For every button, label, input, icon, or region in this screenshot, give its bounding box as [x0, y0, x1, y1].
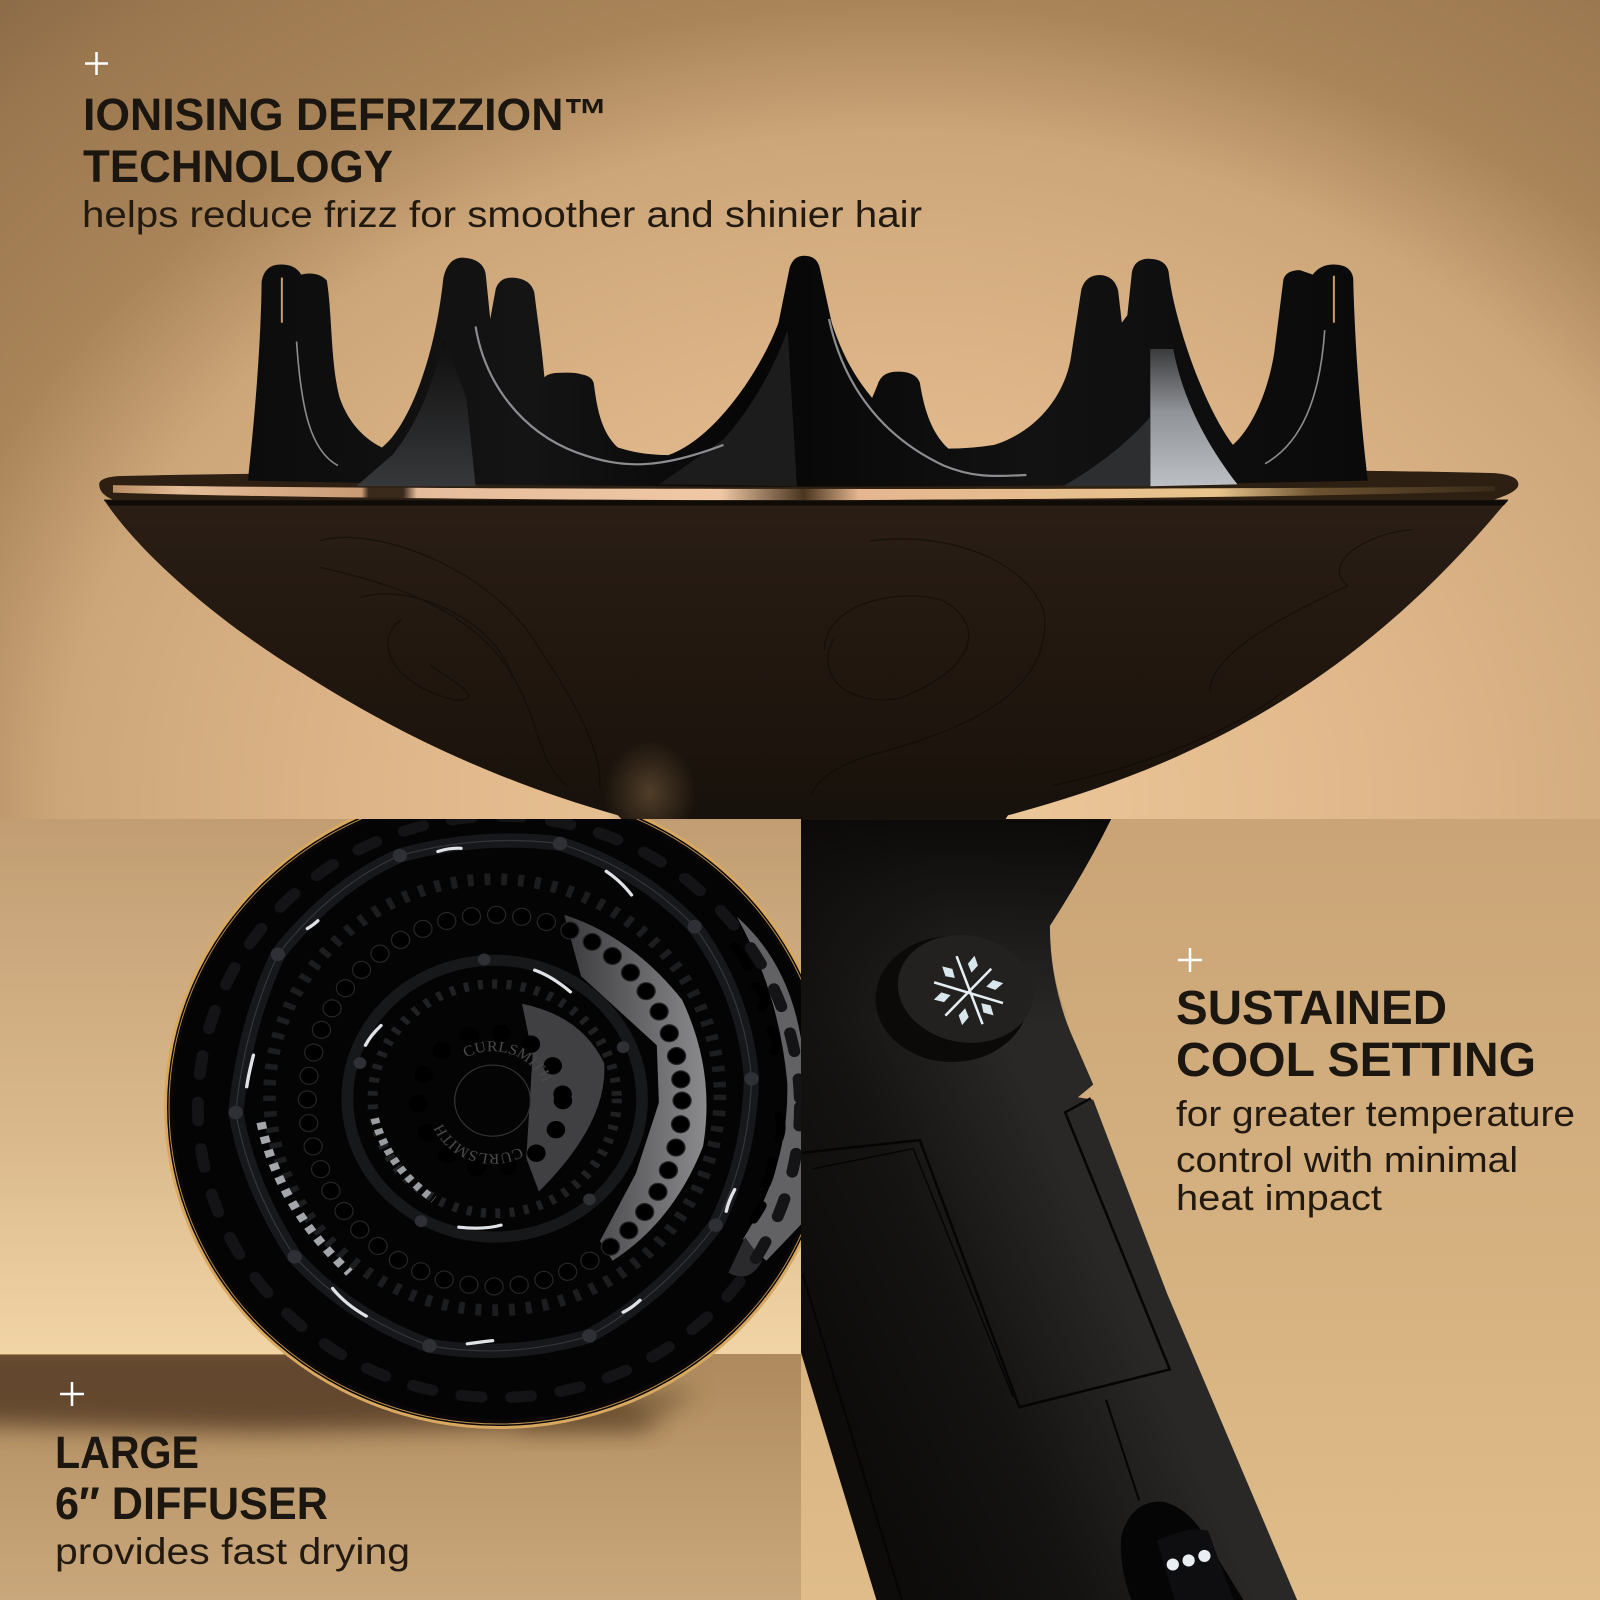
cool button — [876, 936, 1024, 1062]
logo: curlsmith: CURLSMITH — [433, 1124, 522, 1164]
panel: ionising technology — [0, 0, 1600, 845]
diffuser side view — [99, 256, 1518, 845]
text: frizz description: helps reduce frizz for smoother and shinier hair — [82, 194, 922, 235]
heading: sustained cool setting: COOL SETTING — [1176, 1034, 1536, 1087]
logo: curlsmith: CURLSMITH — [464, 1041, 552, 1081]
text: temperature description: for greater temperature — [1176, 1093, 1575, 1134]
heading: ionising defrizzion: IONISING DEFRIZZION™ — [83, 89, 608, 140]
slots on lit section — [752, 1122, 786, 1224]
panel: sustained cool setting — [800, 819, 1600, 1600]
heading: large 6 inch diffuser: 6″ DIFFUSER — [55, 1478, 328, 1529]
text: temperature description: control with minimal — [1176, 1139, 1518, 1180]
panel: large diffuser — [0, 819, 801, 1588]
diffuser front view — [164, 819, 801, 1429]
heading: sustained cool setting: SUSTAINED — [1176, 982, 1447, 1035]
heading: ionising defrizzion: TECHNOLOGY — [83, 141, 393, 192]
plus icon — [60, 1382, 84, 1406]
plus icon — [85, 52, 108, 75]
gold rim — [113, 485, 1495, 500]
logo: curlsmith — [433, 1041, 552, 1164]
hair dryer body — [800, 819, 1297, 1600]
speed switch — [1121, 1501, 1244, 1600]
heading: ionising defrizzion — [83, 89, 608, 192]
plus icon — [1178, 948, 1202, 972]
text: temperature description — [1176, 1093, 1575, 1218]
text: temperature description: heat impact — [1176, 1177, 1382, 1218]
crown prongs — [248, 256, 1368, 487]
heading: sustained cool setting — [1177, 990, 1534, 1076]
text: fast drying: provides fast drying — [55, 1531, 410, 1572]
heading: large 6 inch diffuser — [56, 1436, 327, 1520]
icon: snowflake — [932, 955, 1004, 1026]
heading: large 6 inch diffuser: LARGE — [55, 1427, 199, 1478]
